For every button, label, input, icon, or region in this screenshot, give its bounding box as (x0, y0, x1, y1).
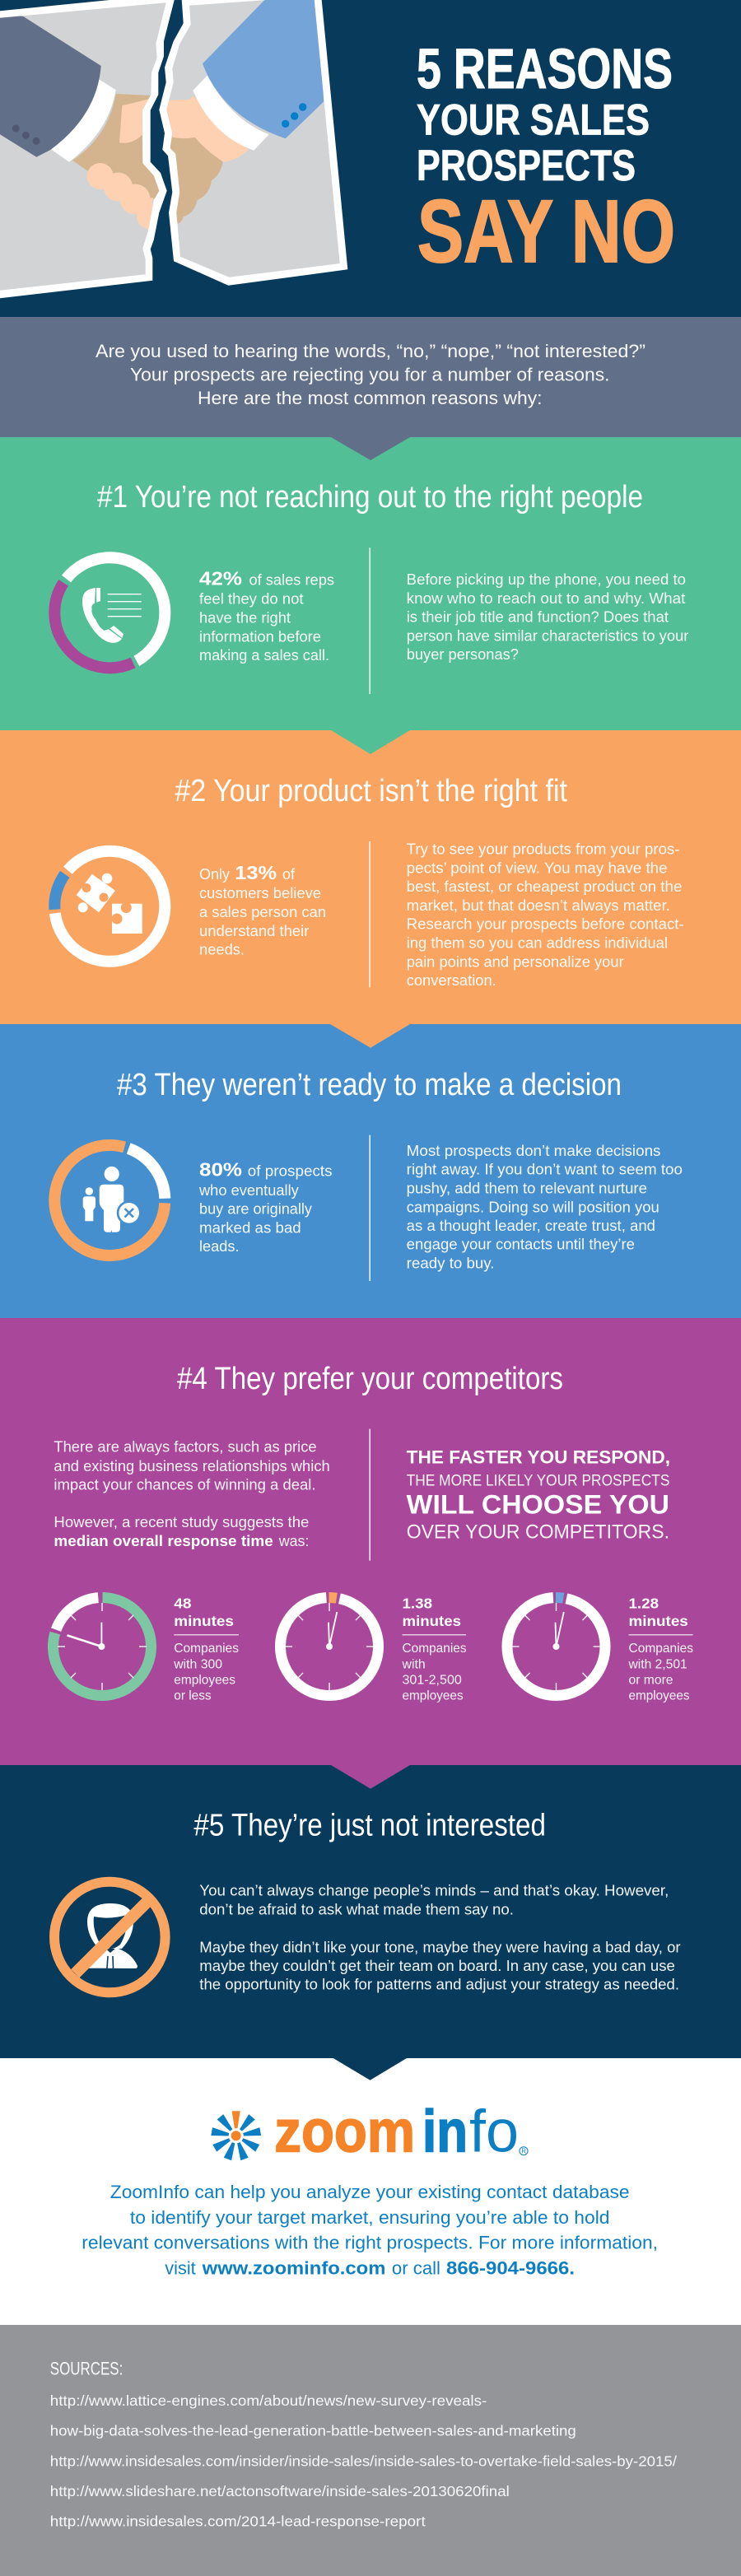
left text block: However, a recent study suggests the (54, 1513, 309, 1530)
stat: 42%: of sales reps (249, 571, 334, 588)
logo: ZoomInfo: zoom (274, 2099, 415, 2164)
sources list: http://www.insidesales.com/insider/inside-sales/inside-sales-to-overtake-field-sales-by-2015/ (50, 2453, 677, 2469)
call to action text: 866-904-9666. (446, 2258, 575, 2279)
clock 3 label: Companies (629, 1642, 693, 1656)
arrow from intro (331, 437, 410, 460)
callout: the faster you respond (407, 1447, 670, 1544)
left text block: and existing business relationships which (54, 1457, 330, 1474)
arrow from reason 2 (330, 1024, 410, 1048)
icon: logo burst (211, 2111, 261, 2160)
intro text: Here are the most common reasons why: (198, 388, 542, 408)
body text 3 (407, 1142, 683, 1272)
logo: ZoomInfo: in (422, 2099, 468, 2164)
stat: 80%: buy are originally (199, 1200, 313, 1218)
heading 1: #1 You’re not reaching out to the right people (97, 480, 643, 515)
clock 2 label: employees (402, 1689, 464, 1703)
body text 1: know who to reach out to and why. What (407, 589, 685, 607)
body text 2 (407, 840, 684, 989)
ring chart: 80% with people icon (54, 1145, 165, 1255)
intro text (96, 341, 645, 408)
clock 2 label: with (402, 1657, 426, 1671)
illustration: torn handshake (0, 0, 347, 298)
call to action text (82, 2182, 658, 2279)
body text 1: is their job title and function? Does that (407, 608, 669, 625)
clock 1 label: minutes (174, 1613, 234, 1629)
stat: 42% (199, 567, 334, 664)
clock 1 label: or less (174, 1689, 212, 1703)
left text block (54, 1438, 330, 1549)
body text 5: the opportunity to look for patterns and adjust your strategy as needed. (199, 1976, 679, 1993)
ring chart: 13% with puzzle icon (54, 851, 165, 962)
stat: 13% (199, 862, 326, 958)
stat: 42%: 42% (199, 567, 242, 589)
body text 3: pushy, add them to relevant nurture (407, 1179, 647, 1196)
panel: reason 4 (0, 1318, 741, 1765)
clock 3 label: 1.28 (629, 1595, 659, 1612)
clock: 1.38 minutes (280, 1597, 378, 1695)
sources list (50, 2392, 677, 2530)
stat: 13%: 13% (235, 862, 277, 883)
logo: ZoomInfo: R (521, 2148, 526, 2155)
clock 1 label: with 300 (173, 1657, 222, 1671)
callout: the faster you respond: OVER YOUR COMPETITORS. (407, 1521, 669, 1544)
heading 4: #4 They prefer your competitors (177, 1362, 563, 1396)
stat: 80%: who eventually (198, 1181, 300, 1199)
stat: 13%: customers believe (199, 884, 321, 901)
body text 3: right away. If you don’t want to seem too (407, 1161, 683, 1178)
sources list: http://www.insidesales.com/2014-lead-response-report (50, 2513, 426, 2530)
body text 2: pects’ point of view. You may have the (407, 859, 668, 876)
heading 2: #2 Your product isn’t the right fit (175, 774, 567, 808)
clock 3 label: with 2,501 (628, 1657, 687, 1671)
body text 3: campaigns. Doing so will position you (407, 1198, 659, 1215)
body text 5 (199, 1882, 681, 1993)
icon: people with x badge (83, 1167, 142, 1232)
body text 1: person have similar characteristics to your (407, 627, 688, 644)
header panel (0, 0, 741, 318)
title: PROSPECTS (417, 142, 636, 190)
arrow from reason 1 (331, 730, 410, 754)
callout: the faster you respond: THE MORE LIKELY YOUR PROSPECTS (407, 1473, 669, 1490)
callout: the faster you respond: THE FASTER YOU RESPOND, (407, 1447, 670, 1467)
body text 2: conversation. (407, 971, 496, 989)
body text 5: You can’t always change people’s minds – and that’s okay. However, (199, 1882, 669, 1899)
stat: 13%: needs. (199, 940, 245, 958)
body text 3: as a thought leader, create trust, and (407, 1217, 655, 1234)
left text block: was: (278, 1532, 309, 1549)
call to action text: ZoomInfo can help you analyze your existing contact database (110, 2182, 630, 2202)
stat: 42%: making a sales call. (199, 646, 329, 664)
call to action text: to identify your target market, ensuring you’re able to hold (130, 2207, 609, 2228)
logo: ZoomInfo: fo (469, 2099, 519, 2164)
intro text: Are you used to hearing the words, “no,” “nope,” “not interested?” (96, 341, 645, 361)
body text 3: Most prospects don’t make decisions (407, 1142, 660, 1159)
ring chart: 42% with phone icon (54, 557, 165, 668)
call to action text: visit (165, 2258, 196, 2279)
title: SAY NO (417, 181, 675, 281)
body text 2: ing them so you can address individual (407, 934, 668, 952)
body text 5: maybe they couldn’t get their team on board. In any case, you can use (199, 1957, 675, 1974)
title (417, 37, 675, 281)
stat: 13%: a sales person can (199, 903, 326, 920)
clock: 1.28 minutes (507, 1597, 605, 1695)
body text 3: ready to buy. (407, 1255, 494, 1272)
callout: the faster you respond: WILL CHOOSE YOU (407, 1490, 669, 1520)
body text 2: Try to see your products from your pros- (407, 840, 680, 857)
panel: reason 5 (0, 1765, 741, 2058)
body text 3: engage your contacts until they’re (407, 1236, 635, 1253)
clock 2 label (402, 1595, 467, 1703)
clock 1 label (173, 1595, 239, 1703)
panel: reason 3 (0, 1024, 741, 1318)
stat: 42%: feel they do not (199, 589, 303, 607)
left text block: There are always factors, such as price (54, 1438, 317, 1456)
sources heading: SOURCES: (50, 2358, 123, 2378)
call to action text: relevant conversations with the right prospects. For more information, (82, 2233, 658, 2253)
body text 2: pain points and personalize your (407, 953, 624, 971)
call to action text: www.zoominfo.com (202, 2258, 385, 2279)
heading 5: #5 They’re just not interested (193, 1808, 546, 1842)
icon: person with prohibition sign (54, 1882, 165, 1992)
stat: 42%: information before (199, 627, 321, 645)
body text 2: best, fastest, or cheapest product on the (407, 878, 682, 895)
torn paper: right half (159, 0, 347, 286)
intro panel (0, 317, 741, 437)
left text block: median overall response time (54, 1532, 273, 1549)
intro text: Your prospects are rejecting you for a number of reasons. (130, 364, 609, 385)
stat: 80%: leads. (199, 1237, 239, 1255)
body text 1: Before picking up the phone, you need to (407, 571, 686, 588)
body text 1 (407, 571, 688, 663)
body text 5: don’t be afraid to ask what made them say no. (199, 1901, 514, 1918)
clock 2 label: 1.38 (402, 1595, 432, 1612)
stat: 80%: marked as bad (199, 1218, 301, 1236)
stat: 13%: understand their (199, 922, 309, 939)
body text 2: Research your prospects before contact- (407, 915, 684, 933)
stat: 42%: have the right (199, 608, 291, 626)
sources list: how-big-data-solves-the-lead-generation-battle-between-sales-and-marketing (50, 2423, 576, 2439)
body text 2: market, but that doesn’t always matter. (407, 897, 670, 914)
stat: 80%: of prospects (248, 1162, 333, 1180)
stat: 80% (198, 1159, 333, 1255)
icon: puzzle pieces (77, 873, 142, 934)
panel: sources (0, 2325, 741, 2576)
sources list: http://www.slideshare.net/actonsoftware/inside-sales-20130620final (50, 2483, 510, 2499)
call to action text: or call (392, 2258, 440, 2279)
arrow from reason 4 (331, 1765, 410, 1789)
clock 1 label: Companies (174, 1642, 239, 1656)
clock 3 label (628, 1595, 693, 1703)
panel: call to action (0, 2058, 741, 2325)
torn paper: left half (0, 0, 175, 298)
logo: ZoomInfo (211, 2099, 528, 2164)
body text 5: Maybe they didn’t like your tone, maybe they were having a bad day, or (199, 1938, 681, 1955)
stat: 80%: 80% (199, 1159, 242, 1181)
heading 3: #3 They weren’t ready to make a decision (117, 1068, 622, 1102)
clock: 48 minutes (53, 1597, 151, 1695)
clock 2 label: 301-2,500 (402, 1673, 462, 1688)
body text 1: buyer personas? (407, 645, 519, 663)
icon: phone (82, 588, 142, 643)
title: 5 REASONS (417, 37, 673, 100)
clock 2 label: Companies (402, 1642, 467, 1656)
clock 3 label: employees (629, 1689, 690, 1703)
stat: 13%: of (282, 865, 296, 883)
left text block: impact your chances of winning a deal. (54, 1475, 316, 1493)
clock 3 label: or more (629, 1673, 673, 1688)
arrow from reason 5 (333, 2058, 407, 2080)
panel: reason 2 (0, 730, 741, 1024)
clock 1 label: employees (174, 1673, 235, 1688)
panel: reason 1 (0, 437, 741, 730)
sources list: http://www.lattice-engines.com/about/news/new-survey-reveals- (50, 2392, 487, 2409)
title: YOUR SALES (417, 96, 650, 145)
stat: 13%: Only (199, 865, 231, 883)
clock 2 label: minutes (402, 1613, 461, 1629)
clock 3 label: minutes (629, 1613, 688, 1629)
clock 1 label: 48 (174, 1595, 192, 1612)
